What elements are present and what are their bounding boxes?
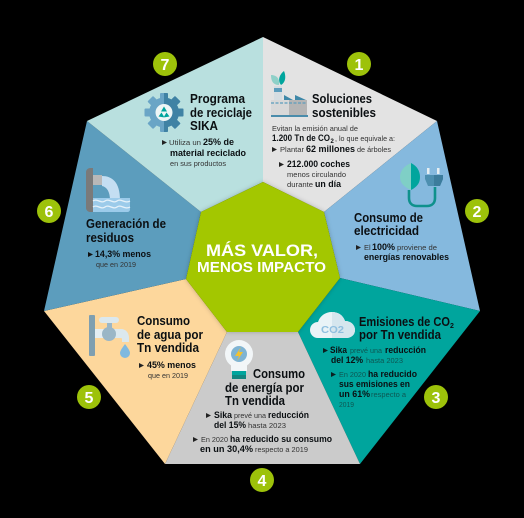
heading: consumo de agua: Consumo bbox=[137, 314, 190, 328]
text: emisión evitada: 1.200 Tn de CO bbox=[272, 133, 330, 143]
panel: 1 soluciones sostenibles bbox=[263, 37, 437, 212]
text: reducción del consumo: ha reducido su consumo bbox=[230, 434, 332, 444]
heading: emisiones de CO2 por Tn vendida: por Tn vendida bbox=[359, 328, 442, 342]
icon: drain pipe bbox=[86, 168, 130, 212]
icon: water tap bbox=[89, 315, 130, 358]
center heptagon: más valor, menos impacto: MÁS VALOR, bbox=[206, 241, 318, 260]
text: emisión evitada: Plantar bbox=[280, 145, 305, 154]
number badge 3: 3 bbox=[432, 390, 441, 407]
text: material reciclado: material reciclado bbox=[170, 148, 246, 158]
panel: 2 consumo de electricidad bbox=[324, 121, 480, 311]
text: reducción del consumo: En 2020 bbox=[201, 435, 228, 444]
text: material reciclado: Utiliza un bbox=[169, 138, 201, 147]
text: reducción de emisiones: hasta 2023 bbox=[366, 356, 403, 365]
heading: consumo de energía por Tn vendida: Consumo bbox=[253, 367, 305, 381]
text: reducción de emisiones: sus emisiones en bbox=[339, 379, 410, 389]
text: reducción del consumo bbox=[193, 410, 332, 454]
text: energías renovables: proviene de bbox=[397, 243, 437, 252]
number badge 2 bbox=[465, 199, 489, 223]
text: emisión evitada: 212.000 coches bbox=[287, 159, 350, 169]
heading: consumo de electricidad: Consumo de bbox=[354, 211, 423, 225]
heading: consumo de energía por Tn vendida: Tn vendida bbox=[225, 394, 286, 408]
heading: soluciones sostenibles: sostenibles bbox=[312, 106, 376, 120]
icon: CO2 cloud bbox=[310, 312, 355, 338]
number badge 4: 4 bbox=[258, 473, 267, 490]
text: 45% menos: que en 2019 bbox=[148, 371, 188, 380]
heading: generación de residuos bbox=[86, 217, 166, 245]
text: material reciclado: 25% de bbox=[203, 137, 234, 147]
text: reducción de emisiones: del 12% bbox=[331, 355, 363, 365]
number badge 1 bbox=[347, 52, 371, 76]
number badge 2: 2 bbox=[473, 204, 482, 221]
text: emisión evitada: 62 millones bbox=[306, 144, 355, 154]
number badge 3 bbox=[424, 385, 448, 409]
heading: emisiones de CO2 por Tn vendida: Emisiones de CO bbox=[359, 315, 450, 329]
text: reducción del consumo: prevé una bbox=[234, 411, 267, 420]
text: material reciclado bbox=[162, 137, 246, 168]
number badge 1: 1 bbox=[355, 57, 364, 74]
text: 45% menos bbox=[139, 360, 196, 380]
number badge 7 bbox=[153, 52, 177, 76]
text: 14,3% menos: 14,3% menos bbox=[95, 249, 151, 259]
heading: soluciones sostenibles bbox=[312, 92, 376, 120]
text: reducción de emisiones: prevé una bbox=[350, 346, 383, 355]
text: 14,3% menos: que en 2019 bbox=[96, 260, 136, 269]
text: reducción de emisiones: reducción bbox=[385, 345, 426, 355]
heading: consumo de agua: de agua por bbox=[137, 328, 203, 342]
text: energías renovables: 100% bbox=[372, 242, 395, 252]
heading: soluciones sostenibles: Soluciones bbox=[312, 92, 372, 106]
text: energías renovables bbox=[356, 242, 449, 262]
heading: consumo de electricidad bbox=[354, 211, 423, 238]
text: reducción del consumo: del 15% bbox=[214, 420, 246, 430]
number badge 6: 6 bbox=[45, 204, 54, 221]
icon: recycling gear bbox=[144, 93, 184, 132]
heading: programa de reciclaje SIKA: de reciclaje bbox=[190, 106, 252, 120]
text: reducción de emisiones: En 2020 bbox=[339, 370, 366, 379]
text: reducción de emisiones: ha reducido bbox=[368, 369, 417, 379]
text: 45% menos: 45% menos bbox=[147, 360, 196, 370]
heading: emisiones de CO2 por Tn vendida bbox=[359, 315, 454, 342]
heading: programa de reciclaje SIKA: SIKA bbox=[190, 119, 218, 133]
number badge 6 bbox=[37, 199, 61, 223]
text: emisión evitada: un día bbox=[315, 179, 342, 189]
text: emisión evitada: de árboles bbox=[357, 145, 391, 154]
text: emisión evitada bbox=[272, 124, 395, 189]
heading: consumo de energía por Tn vendida bbox=[225, 367, 305, 408]
panel: 7 programa de reciclaje bbox=[87, 37, 263, 212]
text: emisión evitada: 2 bbox=[330, 139, 334, 145]
text: reducción del consumo: reducción bbox=[268, 410, 309, 420]
text: energías renovables: El bbox=[364, 243, 371, 252]
text: reducción de emisiones: 2019 bbox=[339, 400, 354, 409]
text: energías renovables: energías renovables bbox=[364, 252, 449, 262]
text: 14,3% menos bbox=[88, 249, 151, 269]
text: emisión evitada: menos circulando bbox=[287, 170, 346, 179]
center heptagon: más valor, menos impacto bbox=[186, 182, 340, 332]
panel: 5 consumo de agua bbox=[44, 279, 227, 464]
heading: programa de reciclaje SIKA bbox=[190, 92, 252, 133]
heading: generación de residuos: residuos bbox=[86, 231, 134, 245]
text: reducción del consumo: en un 30,4% bbox=[200, 444, 253, 454]
heading: programa de reciclaje SIKA: Programa bbox=[190, 92, 246, 106]
text: reducción de emisiones: Sika bbox=[330, 345, 348, 355]
heading: generación de residuos: Generación de bbox=[86, 217, 166, 231]
heading: consumo de energía por Tn vendida: de energía por bbox=[225, 381, 304, 395]
text: material reciclado: en sus productos bbox=[170, 159, 226, 168]
icon: light bulb bbox=[225, 340, 253, 379]
icon: plug and leaf bbox=[400, 163, 443, 206]
text: reducción de emisiones: un 61% bbox=[339, 389, 370, 399]
heading: consumo de agua: Tn vendida bbox=[137, 341, 200, 355]
text: reducción del consumo: respecto a 2019 bbox=[255, 445, 308, 454]
panel: 4 consumo de energía bbox=[165, 332, 360, 464]
heading: emisiones de CO2 por Tn vendida: 2 bbox=[450, 323, 454, 330]
number badge 7: 7 bbox=[161, 57, 170, 74]
text: emisión evitada: , lo que equivale a: bbox=[335, 134, 395, 143]
panel: 6 generación de residuos bbox=[44, 121, 201, 311]
number badge 5 bbox=[77, 385, 101, 409]
icon: CO2 cloud: CO2 bbox=[321, 324, 344, 336]
text: emisión evitada: durante bbox=[287, 180, 313, 189]
text: reducción del consumo: Sika bbox=[214, 410, 233, 420]
text: reducción de emisiones bbox=[323, 345, 426, 409]
heading: consumo de agua bbox=[137, 314, 203, 355]
heading: consumo de electricidad: electricidad bbox=[354, 224, 419, 238]
number badge 5: 5 bbox=[85, 390, 94, 407]
number badge 4 bbox=[250, 468, 274, 492]
text: reducción de emisiones: respecto a bbox=[371, 390, 407, 399]
panel: 3 emisiones de CO2 bbox=[298, 278, 480, 464]
text: emisión evitada: Evitan la emisión anual de bbox=[272, 124, 358, 133]
text: reducción del consumo: hasta 2023 bbox=[248, 421, 286, 430]
center heptagon: más valor, menos impacto: MENOS IMPACTO bbox=[197, 260, 326, 276]
icon: factory with leaves bbox=[271, 71, 308, 117]
